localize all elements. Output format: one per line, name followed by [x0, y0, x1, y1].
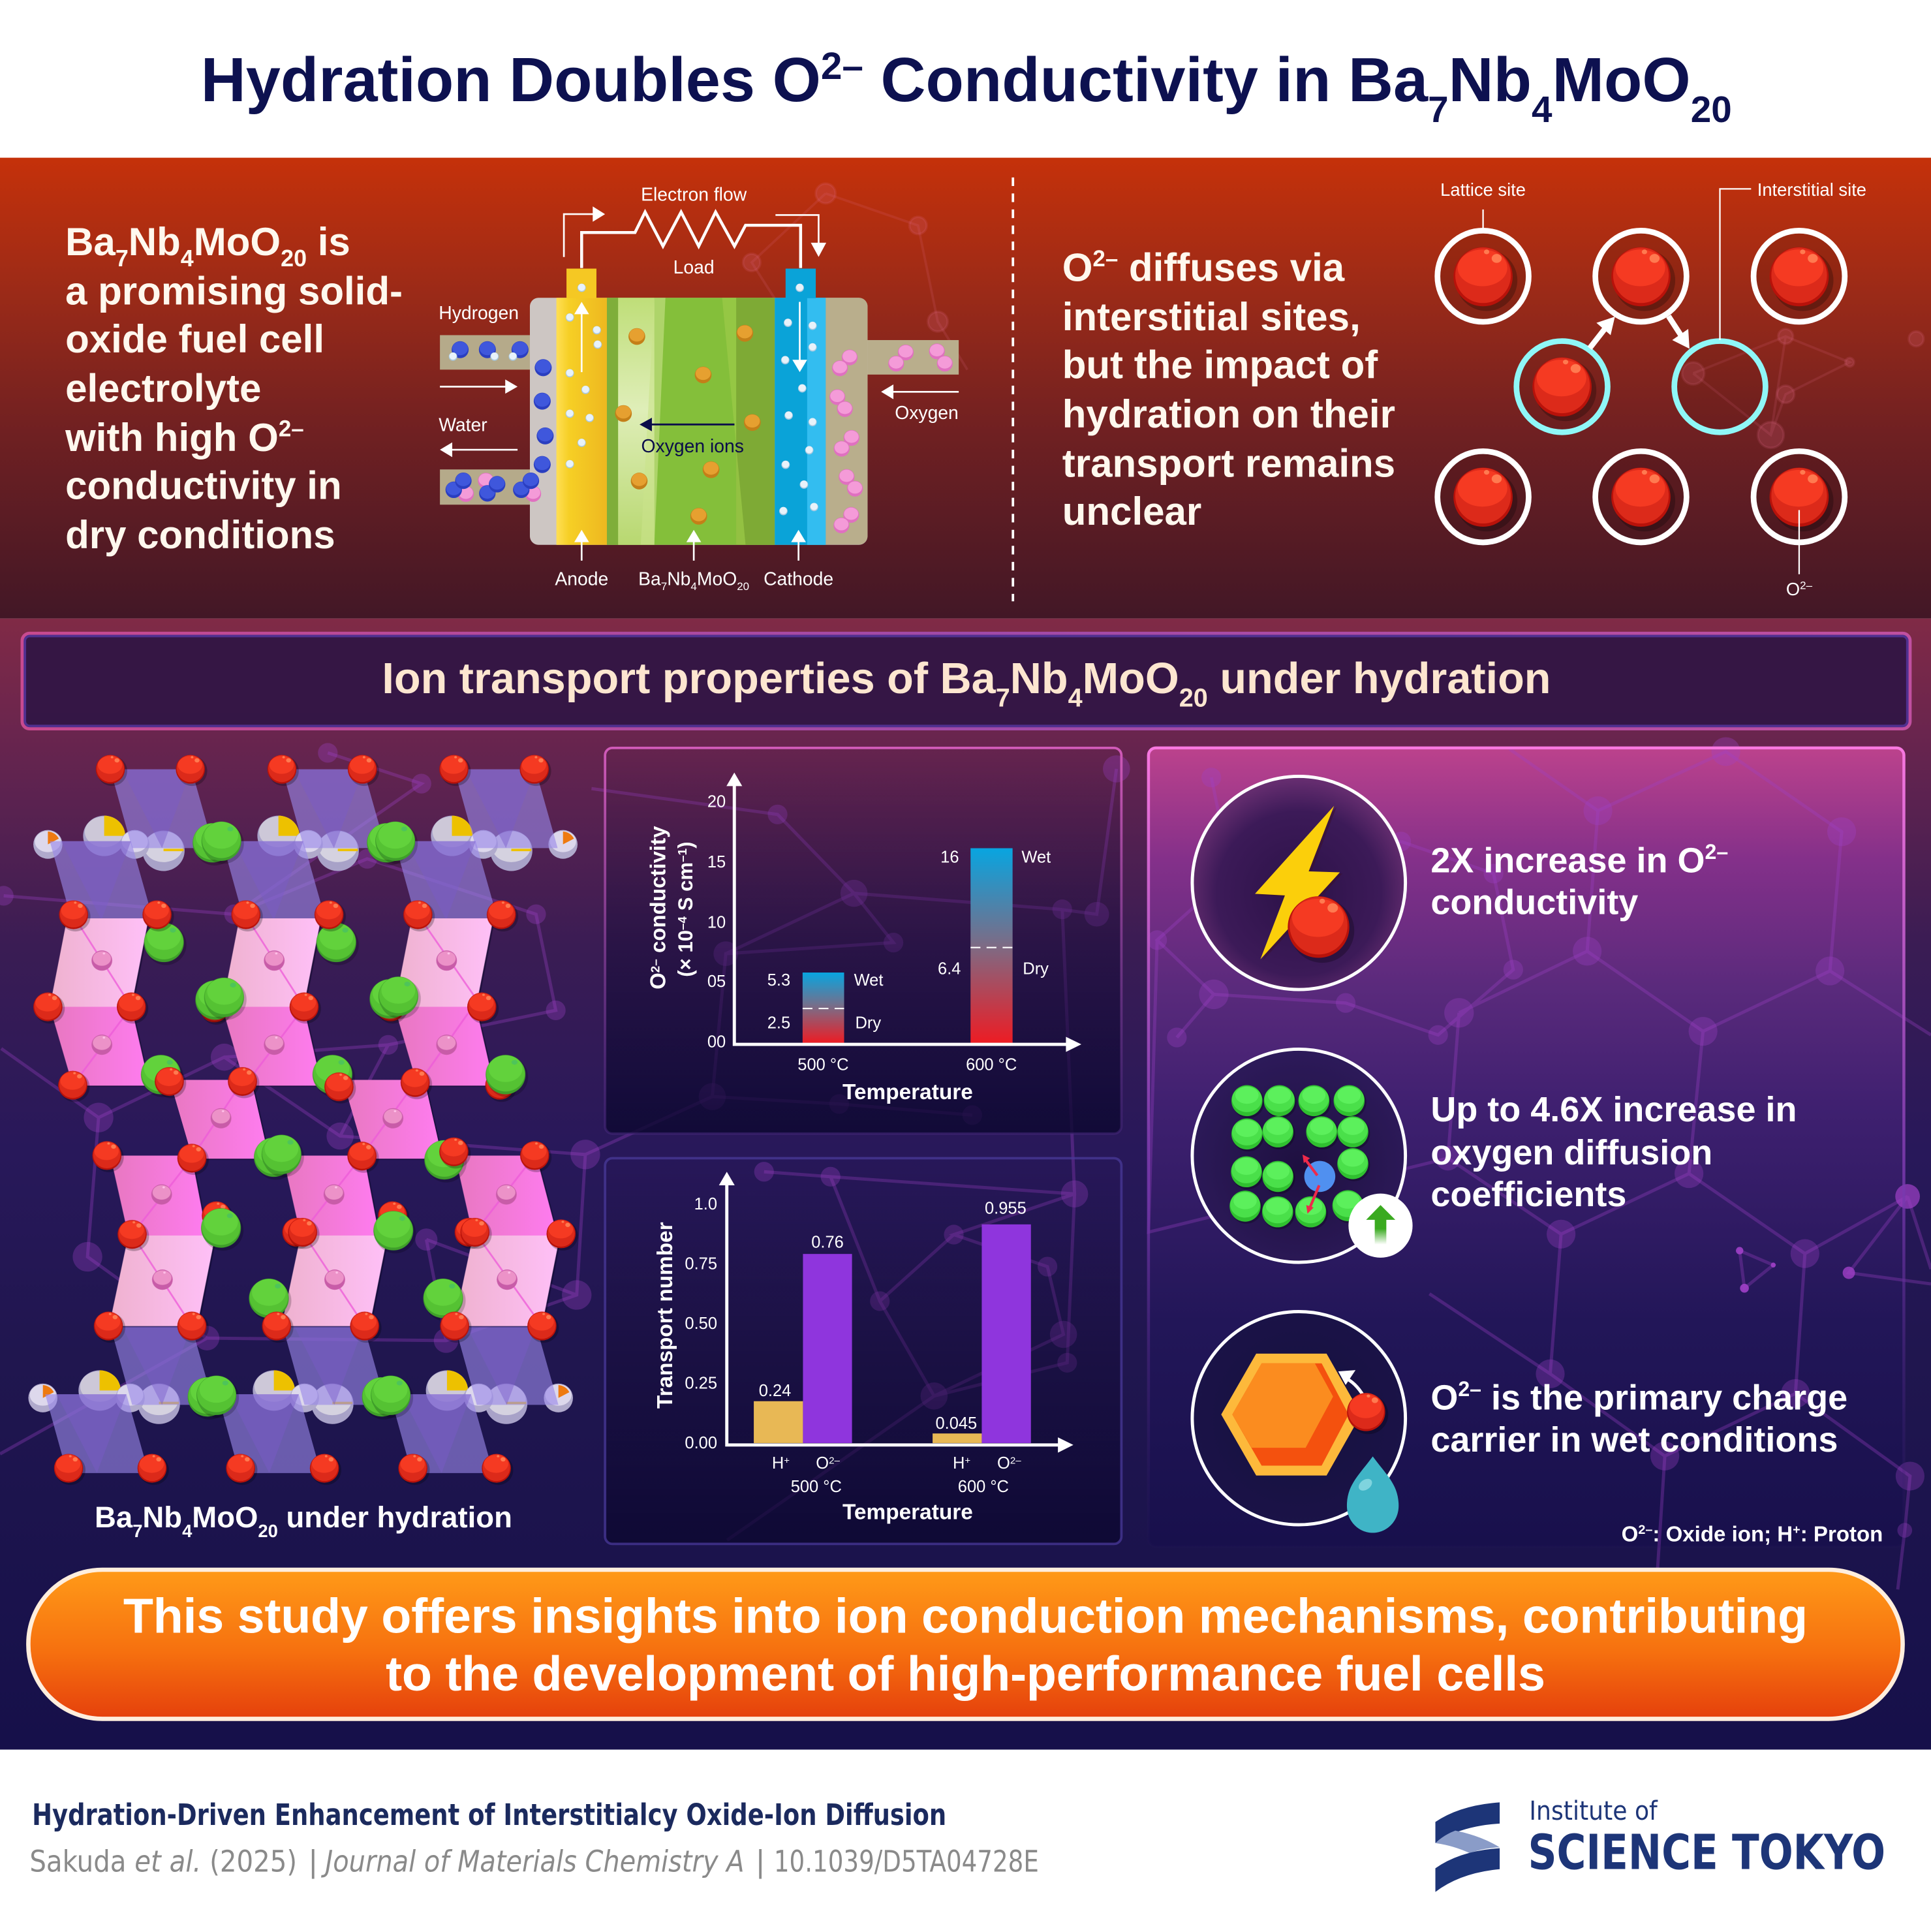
oxygen atoms behind — [200, 993, 517, 1249]
fuel cell labels: MoO — [697, 569, 737, 590]
fuel cell labels: Ba — [638, 569, 661, 590]
water molecules — [446, 473, 541, 502]
footer: citation: Sakuda et al. (2025) — [29, 1845, 297, 1878]
bar values: 5.3 — [767, 971, 790, 989]
site labels: O — [1786, 579, 1800, 599]
bar values — [759, 1199, 1027, 1433]
y axis title: 2– — [649, 959, 662, 973]
title: Nb — [1449, 46, 1532, 115]
title: 2– — [821, 45, 863, 87]
finding: charge carrier — [1430, 1377, 1847, 1459]
footer: citation: | — [308, 1845, 318, 1879]
oxide ions — [1453, 247, 1834, 531]
fuel cell labels: Cathode — [764, 569, 833, 590]
legend: O — [1622, 1523, 1638, 1547]
footer: citation: Journal of Materials Chemistry A — [320, 1845, 745, 1878]
crystal caption: Nb — [142, 1501, 182, 1534]
y ticks — [685, 1195, 717, 1452]
icon: oxygen diffusion — [1192, 1049, 1413, 1262]
y axis title: (× 10 — [674, 930, 697, 977]
bar values: Dry — [855, 1014, 881, 1032]
text block: fuel cell intro: Ba — [65, 220, 116, 264]
y axis title: S cm — [674, 862, 697, 916]
panel: conductivity chart — [605, 748, 1121, 1134]
legend: : Oxide ion; H — [1652, 1523, 1793, 1547]
y ticks: 05 — [707, 973, 726, 991]
electrons — [566, 284, 818, 515]
banner: section heading: 20 — [1179, 684, 1208, 713]
y ticks: 0.75 — [685, 1254, 717, 1273]
bars: transport number — [754, 1224, 1031, 1443]
finding: charge carrier: 2– — [1458, 1377, 1481, 1401]
x labels — [797, 1056, 1017, 1104]
callout: conclusion — [28, 1570, 1903, 1719]
panel: transport number chart — [605, 1158, 1121, 1544]
anode — [557, 269, 607, 545]
oxygen atoms — [33, 755, 578, 1485]
pink polyhedra — [50, 918, 560, 1326]
callout: conclusion: to the development of high-performance fuel cells — [386, 1647, 1545, 1702]
x labels: 600 °C — [958, 1478, 1009, 1496]
banner: section heading: 4 — [1068, 684, 1083, 713]
text block: fuel cell intro: with high O — [65, 416, 279, 460]
finding: diffusion — [1430, 1090, 1797, 1214]
purple polyhedra — [45, 770, 559, 1473]
title: 7 — [1428, 89, 1449, 131]
y ticks: 20 — [707, 792, 726, 811]
interstitial sites — [1517, 341, 1765, 432]
finding: conductivity — [1430, 840, 1728, 922]
lattice sites — [1438, 230, 1845, 542]
bar values — [767, 848, 1051, 1032]
text block: diffusion question: diffuses via — [1118, 245, 1345, 289]
bar values: 16 — [940, 848, 959, 866]
footer background — [0, 1750, 1931, 1932]
text block: fuel cell intro: Nb — [129, 220, 181, 264]
site labels: Lattice site — [1440, 179, 1526, 200]
y ticks: 10 — [707, 913, 726, 931]
hopping arrows — [1590, 316, 1690, 349]
finding: charge carrier: is the primary charge — [1481, 1379, 1847, 1418]
text block: fuel cell intro: a promising solid- — [65, 269, 403, 313]
arrows: electron flow — [564, 206, 826, 257]
text block: diffusion question: but the impact of — [1062, 343, 1378, 387]
y ticks: 15 — [707, 853, 726, 871]
y ticks: 0.00 — [685, 1434, 717, 1452]
x labels: 2– — [829, 1456, 840, 1467]
text block: fuel cell intro: electrolyte — [65, 366, 261, 410]
text block: diffusion question — [1062, 245, 1395, 533]
oxygen ions — [615, 325, 761, 525]
bonds — [73, 914, 542, 1326]
text block: diffusion question: transport remains — [1062, 442, 1395, 486]
title: 20 — [1691, 89, 1732, 131]
finding: diffusion: oxygen diffusion — [1430, 1133, 1712, 1172]
banner: section heading: 7 — [996, 684, 1010, 713]
x labels: H — [772, 1454, 784, 1472]
electron wire and load — [581, 212, 801, 268]
text block: fuel cell intro — [65, 220, 403, 557]
x labels: 600 °C — [966, 1056, 1017, 1074]
legend: 2– — [1638, 1523, 1652, 1537]
text block: diffusion question: hydration on their — [1062, 392, 1395, 436]
text block: fuel cell intro: 7 — [116, 245, 129, 272]
title: Conductivity in Ba — [863, 46, 1429, 115]
fuel cell labels: 4 — [690, 580, 697, 593]
x labels: + — [965, 1456, 970, 1467]
header background — [0, 0, 1931, 158]
diagram: lattice and interstitial sites — [1438, 179, 1866, 599]
cell body — [530, 298, 867, 545]
bar values: 0.76 — [811, 1233, 844, 1251]
bars: conductivity — [803, 849, 1013, 1043]
finding: conductivity: conductivity — [1430, 883, 1638, 922]
crystal caption: under hydration — [278, 1501, 512, 1534]
footer: paper title: Hydration-Driven Enhancement of Interstitialcy Oxide-Ion Diffusion — [32, 1798, 946, 1832]
x labels — [772, 1454, 1021, 1525]
text block: fuel cell intro: 4 — [181, 245, 194, 272]
y axis title: conductivity — [647, 826, 671, 959]
text block: fuel cell intro: 2– — [279, 416, 304, 441]
text block: diffusion question: O — [1062, 245, 1092, 289]
title: MoO — [1552, 46, 1691, 115]
crystal caption: Ba — [95, 1501, 132, 1534]
text block: fuel cell intro: 20 — [281, 245, 307, 272]
text block: diffusion question: 2– — [1092, 246, 1118, 272]
bar values: 2.5 — [767, 1014, 790, 1032]
text block: fuel cell intro: dry conditions — [65, 513, 335, 557]
y axis title: O — [647, 973, 671, 989]
y axis title: –1 — [676, 849, 690, 862]
finding: diffusion: Up to 4.6X increase in — [1430, 1090, 1797, 1129]
title: 4 — [1532, 89, 1553, 131]
fuel cell labels — [439, 185, 959, 593]
y ticks: 1.0 — [694, 1195, 717, 1213]
x labels: 500 °C — [797, 1056, 848, 1074]
fuel cell labels: Hydrogen — [439, 303, 519, 324]
fuel cell labels: Load — [673, 257, 715, 278]
upper background panel — [0, 158, 1931, 619]
bar values: Wet — [1021, 848, 1051, 866]
banner: section heading: Ion transport properties of Ba — [382, 655, 996, 703]
background molecular network — [0, 737, 1931, 1589]
footer: citation: | — [756, 1845, 765, 1879]
x labels: 2– — [1010, 1456, 1021, 1467]
green atoms — [141, 822, 528, 1420]
icon: conductivity bolt — [1192, 776, 1406, 989]
x labels: H — [953, 1454, 965, 1472]
logo: Institute of Science Tokyo: Institute of — [1529, 1796, 1658, 1826]
bar values: 6.4 — [938, 959, 961, 978]
gas pipes — [440, 335, 959, 505]
site labels — [1440, 179, 1866, 599]
crystal structure — [28, 755, 578, 1485]
x labels: + — [784, 1456, 790, 1467]
fuel cell labels: Anode — [555, 569, 608, 590]
barium atoms — [28, 816, 578, 1424]
bar values: Dry — [1023, 959, 1049, 978]
fuel cell labels: Oxygen — [895, 403, 959, 424]
fuel cell labels: Nb — [667, 569, 690, 590]
arrows: charge carriers — [574, 302, 807, 561]
bar values: 0.045 — [935, 1414, 977, 1433]
text block: diffusion question: interstitial sites, — [1062, 295, 1361, 339]
crystal caption: 4 — [182, 1521, 193, 1541]
callout: conclusion: This study offers insights into ion conduction mechanisms, contributing — [123, 1589, 1808, 1644]
fuel cell labels: 20 — [737, 580, 749, 593]
y ticks: 0.25 — [685, 1375, 717, 1392]
panel: key findings — [1149, 748, 1904, 1547]
fuel cell labels: Water — [439, 415, 487, 436]
y axis title: –4 — [676, 916, 690, 930]
hydrogen molecules — [449, 341, 553, 473]
icon: charge carrier — [1192, 1312, 1406, 1533]
y ticks: 0.50 — [685, 1315, 717, 1333]
text block: fuel cell intro: conductivity in — [65, 464, 342, 508]
x labels: O — [816, 1454, 829, 1472]
x labels: O — [997, 1454, 1010, 1472]
finding: charge carrier: carrier in wet conditions — [1430, 1420, 1838, 1459]
footer: citation — [29, 1845, 1039, 1879]
y axis title: Transport number — [653, 1222, 677, 1409]
faint network in upper section — [743, 183, 1924, 448]
crystal caption: MoO — [192, 1501, 258, 1534]
axes — [726, 773, 1081, 1052]
banner: section heading: MoO — [1083, 655, 1179, 703]
x labels: Temperature — [842, 1080, 973, 1104]
finding: diffusion: coefficients — [1430, 1175, 1626, 1214]
legend: + — [1793, 1523, 1800, 1537]
arrow: oxygen ions — [640, 418, 734, 431]
lower background panel — [0, 619, 1931, 1750]
title: Hydration Doubles O — [201, 46, 821, 115]
text block: fuel cell intro: is — [307, 220, 350, 264]
diagram: fuel cell — [439, 185, 959, 593]
crystal caption: 20 — [258, 1521, 278, 1541]
fuel cell labels: 7 — [661, 580, 667, 593]
y axis title — [647, 826, 697, 989]
x labels: Temperature — [842, 1501, 973, 1525]
banner: section heading: under hydration — [1208, 655, 1551, 703]
y ticks — [707, 792, 726, 1052]
logo: Institute of Science Tokyo — [1436, 1796, 1885, 1892]
bar values: 0.955 — [985, 1199, 1027, 1217]
y axis title: ) — [674, 842, 697, 849]
finding: conductivity: 2– — [1705, 840, 1728, 864]
site labels: 2– — [1800, 579, 1813, 591]
central pink atoms — [91, 950, 518, 1290]
x labels: 500 °C — [791, 1478, 842, 1496]
site labels: Interstitial site — [1757, 179, 1866, 200]
electrolyte — [607, 298, 775, 545]
bar values: Wet — [854, 971, 883, 989]
legend: : Proton — [1800, 1523, 1883, 1547]
oxygen molecules — [829, 343, 953, 533]
axes — [719, 1172, 1074, 1453]
footer: citation: 10.1039/D5TA04728E — [774, 1845, 1039, 1878]
arrows: gas flow — [440, 379, 959, 457]
crystal caption: 7 — [132, 1521, 142, 1541]
fuel cell labels: Electron flow — [641, 185, 747, 206]
finding: conductivity: 2X increase in O — [1430, 841, 1705, 880]
text block: fuel cell intro: MoO — [194, 220, 281, 264]
banner: section heading — [22, 633, 1910, 729]
y ticks: 00 — [707, 1033, 726, 1052]
panel background: key findings — [1149, 748, 1904, 1546]
text block: diffusion question: unclear — [1062, 490, 1201, 533]
finding: charge carrier: O — [1430, 1379, 1458, 1418]
fuel cell labels: Oxygen ions — [641, 436, 744, 457]
bar values: 0.24 — [759, 1382, 791, 1400]
cathode — [775, 269, 826, 545]
text block: fuel cell intro: oxide fuel cell — [65, 317, 324, 361]
banner: section heading: Nb — [1010, 655, 1068, 703]
